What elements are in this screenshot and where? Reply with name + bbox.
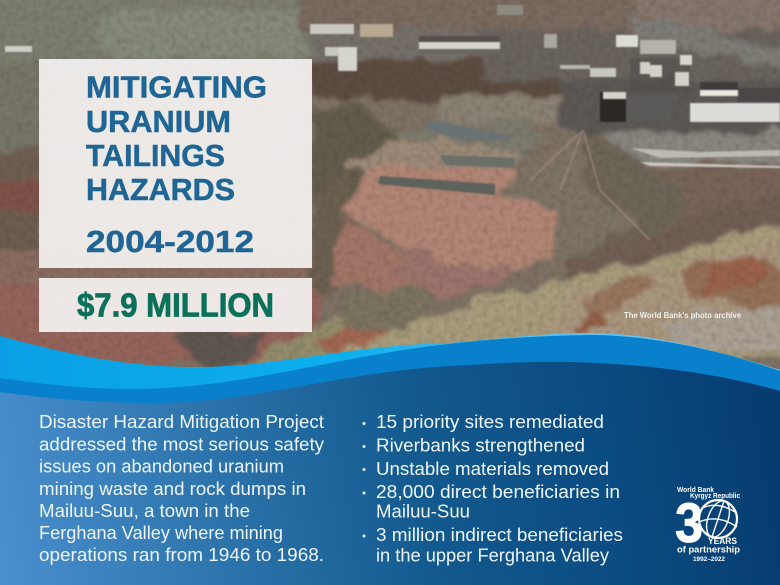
text block: project description <box>39 412 324 565</box>
logo: World Bank 30 years: 1992–2022 <box>693 556 725 563</box>
heading <box>86 70 267 207</box>
photo grain texture <box>0 0 780 385</box>
logo: World Bank 30 years: of partnership <box>677 544 740 556</box>
photo: mining site landscape <box>0 0 780 390</box>
wave: light cyan band <box>0 333 780 585</box>
heading: TAILINGS <box>86 138 225 173</box>
project dates: 2004-2012 <box>86 224 254 259</box>
bullet list: results <box>362 412 623 566</box>
logo numeral 3: 3 <box>675 491 703 554</box>
wave: medium blue band <box>0 335 780 585</box>
heading: MITIGATING <box>86 70 267 104</box>
panel: project cost: $7.9 MILLION <box>77 286 274 324</box>
wave: dark gradient base <box>0 362 780 585</box>
panel: title <box>39 59 312 268</box>
bullet list: results: in the upper Ferghana Valley <box>376 546 609 566</box>
photo credit: The World Bank's photo archive <box>624 311 742 320</box>
text block: project description: Ferghana Valley where mining <box>39 523 283 543</box>
text block: project description: Mailuu-Suu, a town in the <box>39 501 250 521</box>
text block: project description: operations ran from 1946 to 1968. <box>39 545 324 565</box>
text block: project description: Disaster Hazard Mitigation Project <box>39 412 324 432</box>
heading: URANIUM <box>86 104 231 139</box>
logo: World Bank 30 years: World Bank <box>677 487 714 494</box>
icon: globe <box>699 498 737 540</box>
heading: HAZARDS <box>86 172 235 207</box>
text block: project description: mining waste and rock dumps in <box>39 479 306 499</box>
bullet list: results: 3 million indirect beneficiaries <box>376 525 623 545</box>
logo: World Bank 30 years: Kyrgyz Republic <box>690 493 740 500</box>
bullet list: results: Riverbanks strengthened <box>376 436 585 456</box>
panel: project cost <box>39 278 312 332</box>
logo: World Bank 30 years: YEARS <box>708 536 737 547</box>
text block: project description: issues on abandoned uranium <box>39 456 284 476</box>
bullet list: results: Unstable materials removed <box>376 459 609 479</box>
logo: World Bank 30 years <box>675 487 740 563</box>
text block: project description: addressed the most serious safety <box>39 434 324 454</box>
bullet list: results: 28,000 direct beneficiaries in <box>376 482 620 502</box>
bullet list: results: Mailuu-Suu <box>376 502 470 522</box>
bullet list: results: 15 priority sites remediated <box>376 412 604 432</box>
